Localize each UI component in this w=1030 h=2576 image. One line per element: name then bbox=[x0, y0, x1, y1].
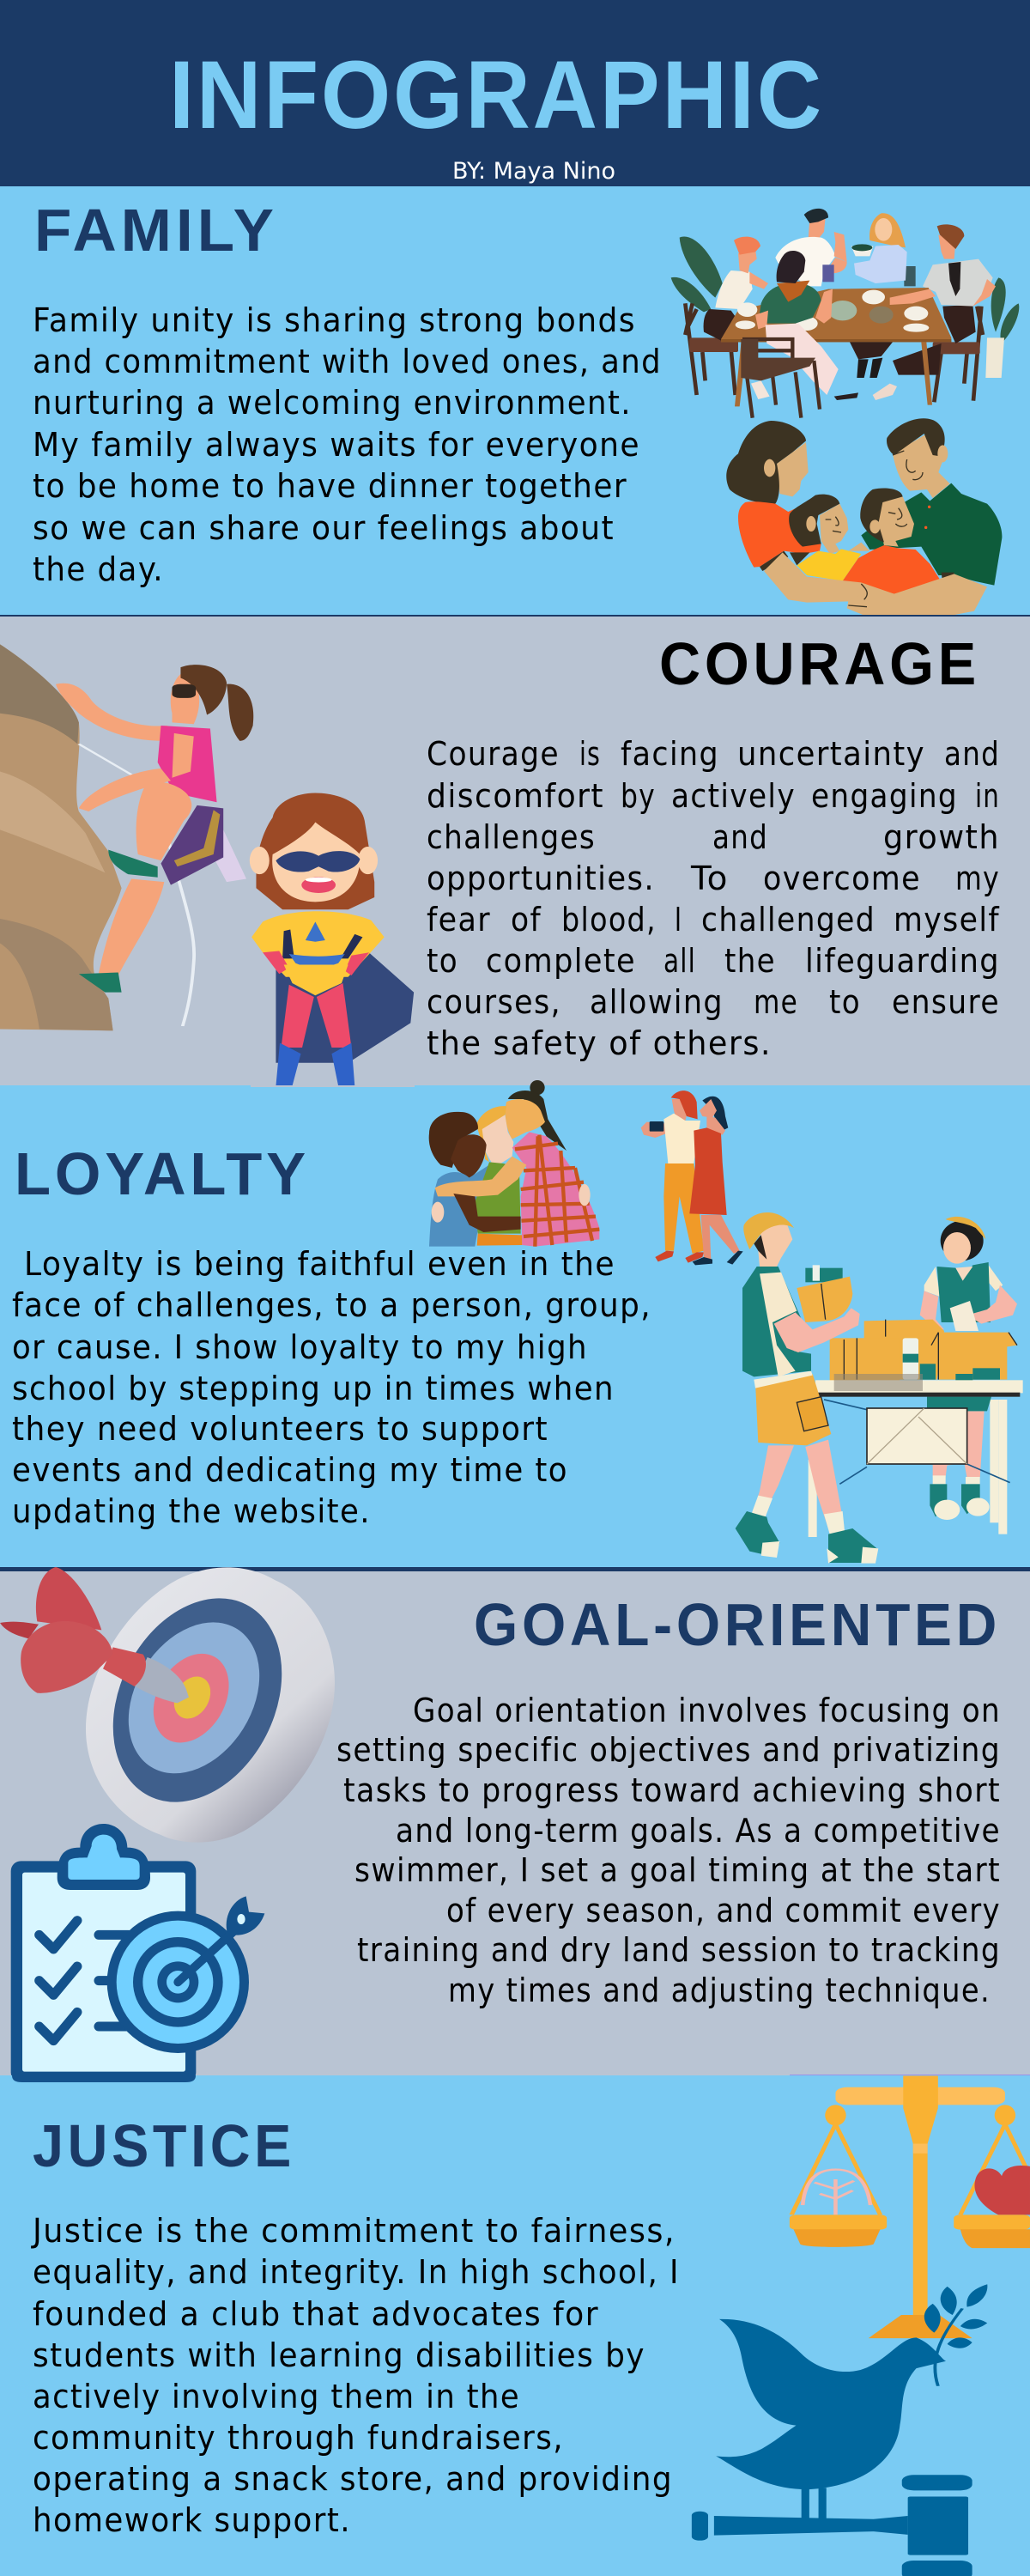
text: courage body: growth bbox=[883, 818, 1000, 856]
icon: friends hugging bbox=[429, 1080, 599, 1247]
panel: family bbox=[0, 186, 1030, 617]
icon: superhero child bbox=[250, 793, 414, 1086]
text: courage body: in bbox=[975, 777, 1000, 815]
icon: scales of justice bbox=[790, 2076, 1030, 2338]
text: justice body: students with learning disabilities by bbox=[33, 2336, 645, 2374]
icon: dartboard target bbox=[0, 1567, 335, 1843]
text: family body: to be home to have dinner together bbox=[33, 467, 627, 505]
text: courage body: overcome bbox=[763, 860, 921, 897]
text: justice body: founded a club that advocates for bbox=[33, 2295, 599, 2333]
text: family body: Family unity is sharing strong bonds bbox=[33, 301, 636, 339]
text: loyalty body: updating the website. bbox=[12, 1492, 371, 1530]
text: courage body: and bbox=[944, 735, 1000, 773]
icon: family dinner table bbox=[671, 209, 1019, 418]
byline: BY: Maya Nino bbox=[452, 158, 615, 185]
text: courage body: actively bbox=[671, 777, 796, 815]
text: justice body: Justice is the commitment to fairness, bbox=[31, 2212, 676, 2250]
panel: justice bbox=[0, 2075, 1030, 2576]
text: loyalty body: school by stepping up in times when bbox=[12, 1370, 615, 1407]
heading: family: FAMILY bbox=[34, 197, 278, 264]
text: courage body: by bbox=[621, 777, 656, 815]
text: loyalty body: events and dedicating my time to bbox=[12, 1451, 568, 1489]
title: INFOGRAPHIC bbox=[169, 41, 824, 149]
text: courage body: my bbox=[955, 860, 1000, 897]
icon: two women taking selfie bbox=[641, 1091, 743, 1265]
icon: rock climber bbox=[0, 644, 253, 1030]
text: courage body: ensure bbox=[892, 983, 1000, 1021]
text: courage body: allowing bbox=[590, 983, 724, 1021]
text: courage body: of bbox=[511, 901, 542, 939]
text: family body bbox=[33, 301, 662, 588]
clipboard bottom edge bbox=[12, 2075, 196, 2082]
text: courage body: challenged bbox=[701, 901, 876, 939]
text: courage body: myself bbox=[894, 901, 1000, 939]
panel: courage bbox=[0, 617, 1030, 1086]
text: courage body: discomfort bbox=[427, 777, 604, 815]
text: courage body: to bbox=[427, 942, 458, 980]
text: courage body: complete bbox=[486, 942, 636, 980]
text: justice body: operating a snack store, and providing bbox=[33, 2460, 673, 2498]
icon: dove with olive branch on gavel bbox=[692, 2284, 987, 2576]
text: loyalty body: face of challenges, to a person, group, bbox=[12, 1286, 651, 1324]
heading: justice: JUSTICE bbox=[33, 2112, 295, 2179]
text: courage body: all bbox=[663, 942, 696, 980]
text: family body: and commitment with loved ones, and bbox=[33, 343, 662, 380]
icon: volunteers packing boxes bbox=[734, 1212, 1030, 1571]
text: goal body bbox=[336, 1692, 1001, 2009]
text: courage body: opportunities. bbox=[427, 860, 655, 897]
text: justice body: equality, and integrity. In high school, I bbox=[33, 2253, 680, 2291]
panel: header bbox=[0, 0, 1030, 186]
text: courage body: I bbox=[675, 901, 682, 939]
icon: parents hugging children bbox=[726, 418, 1002, 617]
text: loyalty body bbox=[12, 1245, 651, 1530]
text: loyalty body: or cause. I show loyalty to my high bbox=[12, 1328, 588, 1366]
text: courage body: engaging bbox=[811, 777, 958, 815]
text: courage body: Courage bbox=[427, 735, 560, 773]
text: courage body: fear bbox=[427, 901, 491, 939]
text: courage body: blood, bbox=[561, 901, 657, 939]
text: justice body: homework support. bbox=[33, 2501, 351, 2539]
text: loyalty body: Loyalty is being faithful even in the bbox=[24, 1245, 615, 1283]
text: courage body: is bbox=[579, 735, 601, 773]
text: family body: My family always waits for everyone bbox=[33, 426, 640, 464]
panel: goal-oriented bbox=[0, 1567, 1030, 2082]
text: courage body: and bbox=[712, 818, 768, 856]
heading: loyalty: LOYALTY bbox=[15, 1140, 310, 1207]
text: courage body: the safety of others. bbox=[427, 1024, 772, 1062]
text: courage body bbox=[427, 735, 1000, 1062]
text: justice body: actively involving them in the bbox=[33, 2378, 520, 2415]
text: courage body: To bbox=[690, 860, 729, 897]
text: family body: nurturing a welcoming environment. bbox=[33, 384, 632, 422]
heading: courage: COURAGE bbox=[659, 630, 980, 697]
text: courage body: challenges bbox=[427, 818, 596, 856]
text: courage body: uncertainty bbox=[737, 735, 925, 773]
text: courage body: facing bbox=[621, 735, 719, 773]
text: courage body: me bbox=[754, 983, 798, 1021]
text: family body: so we can share our feelings about bbox=[33, 509, 615, 547]
text: loyalty body: they need volunteers to support bbox=[12, 1410, 548, 1448]
icon: clipboard with target bbox=[11, 1824, 264, 2082]
panel: loyalty bbox=[0, 1080, 1030, 1571]
text: courage body: courses, bbox=[427, 983, 561, 1021]
heading: goal-oriented: GOAL-ORIENTED bbox=[474, 1591, 1001, 1658]
text: courage body: lifeguarding bbox=[805, 942, 1000, 980]
text: courage body: to bbox=[829, 983, 861, 1021]
text: justice body bbox=[31, 2212, 680, 2539]
text: courage body: the bbox=[724, 942, 776, 980]
text: justice body: community through fundraisers, bbox=[33, 2419, 564, 2457]
text: family body: the day. bbox=[33, 550, 164, 588]
